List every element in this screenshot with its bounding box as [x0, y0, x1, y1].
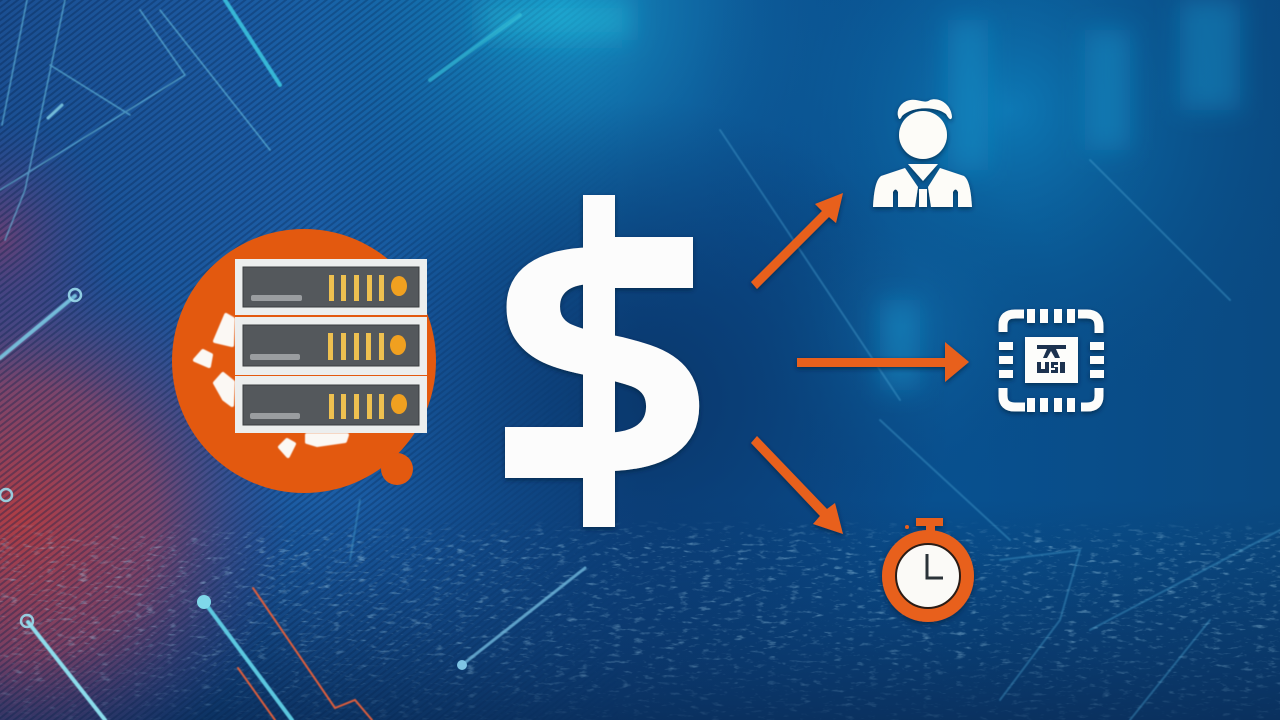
case: [882, 530, 974, 622]
torso right: [928, 168, 972, 207]
white debris fragments: [195, 315, 347, 456]
arrow: to stopwatch: [751, 436, 843, 534]
icon: person: [873, 99, 972, 207]
server unit 1: [235, 259, 427, 315]
icon: server stack on orange circle: [172, 229, 436, 493]
server unit 3: [235, 376, 427, 433]
hands: [927, 554, 943, 578]
head: [899, 111, 947, 159]
collar: [908, 164, 938, 181]
arrow: to person: [751, 193, 843, 289]
chip die marks: [1037, 345, 1066, 373]
chip die: [1025, 337, 1078, 383]
dial: [896, 544, 960, 608]
crown: [916, 518, 943, 533]
dollar sign: $: [497, 175, 701, 542]
tie: [919, 189, 927, 207]
hair: [898, 99, 952, 119]
small orange dot: [381, 453, 413, 485]
torso left: [873, 168, 918, 207]
arrow: to chip: [797, 342, 969, 382]
server unit 2: [235, 317, 427, 375]
icon: stopwatch: [882, 518, 974, 622]
icon: microchip: [999, 309, 1104, 412]
orange circle: [172, 229, 436, 493]
